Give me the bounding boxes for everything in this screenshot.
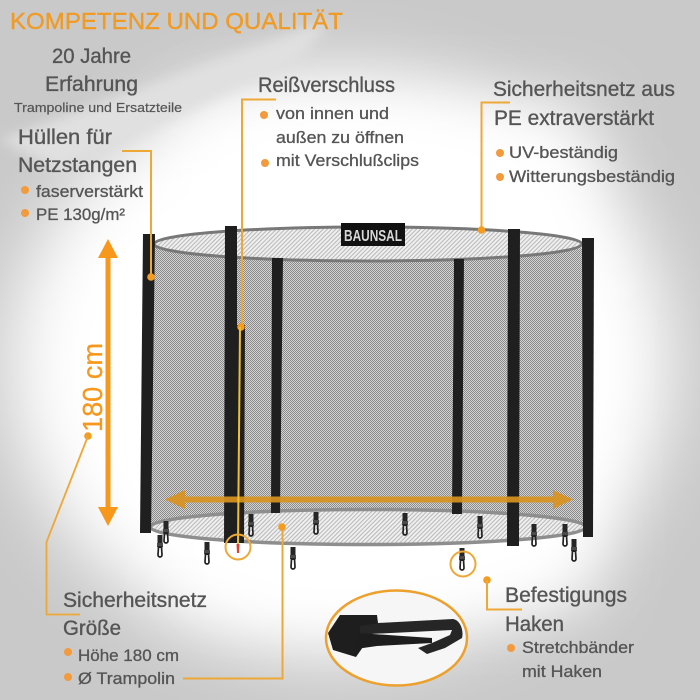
callout: safety net material: PE extraverstärkt	[494, 107, 654, 130]
hook close-up	[326, 590, 467, 686]
height arrow	[77, 239, 118, 526]
text block: experience: 20 Jahre	[52, 45, 131, 68]
logo label	[341, 223, 405, 246]
bottom ring	[150, 510, 586, 544]
callout: net size	[46, 432, 286, 688]
callout: safety net material: UV-beständig	[509, 144, 618, 162]
callout: covers: Netzstangen	[18, 154, 137, 177]
text block: experience: Erfahrung	[45, 73, 138, 96]
callout: safety net material	[478, 78, 675, 234]
callout: covers: Hüllen für	[18, 126, 112, 149]
height label: 180 cm	[77, 343, 108, 432]
callout: zipper: Reißverschluss	[258, 74, 395, 97]
callout: net size: Sicherheitsnetz	[63, 589, 207, 612]
callout: covers: PE 130g/m²	[36, 206, 126, 224]
callout: fastening hooks: Haken	[505, 613, 564, 636]
callout: fastening hooks	[450, 552, 635, 681]
callout: safety net material: Witterungsbeständig	[509, 168, 675, 186]
callout: zipper: von innen und	[276, 105, 389, 123]
callout: zipper: außen zu öffnen	[276, 129, 404, 147]
diameter arrow	[165, 490, 573, 509]
callout: covers	[18, 126, 155, 281]
text block: experience: Trampoline und Ersatzteile	[14, 100, 182, 115]
callout: net size: Ø Trampolin	[78, 670, 175, 688]
trampoline safety net	[140, 223, 594, 570]
title: KOMPETENZ UND QUALITÄT	[10, 8, 343, 34]
hooks	[157, 512, 577, 570]
callout: covers: faserverstärkt	[36, 183, 143, 201]
callout: fastening hooks: Stretchbänder	[522, 639, 635, 657]
callout: fastening hooks: Befestigungs	[505, 584, 627, 607]
callout: net size: Höhe 180 cm	[78, 647, 179, 665]
top ring	[154, 227, 582, 261]
logo label: BAUNSAL	[344, 228, 402, 245]
callout: zipper	[226, 74, 419, 560]
net poles	[140, 226, 594, 546]
text block: experience	[14, 45, 182, 115]
callout: safety net material: Sicherheitsnetz aus	[493, 78, 675, 101]
callout: fastening hooks: mit Haken	[522, 663, 602, 681]
callout: net size: Größe	[63, 617, 121, 640]
net body	[150, 244, 586, 545]
callout: zipper: mit Verschlußclips	[276, 152, 419, 170]
